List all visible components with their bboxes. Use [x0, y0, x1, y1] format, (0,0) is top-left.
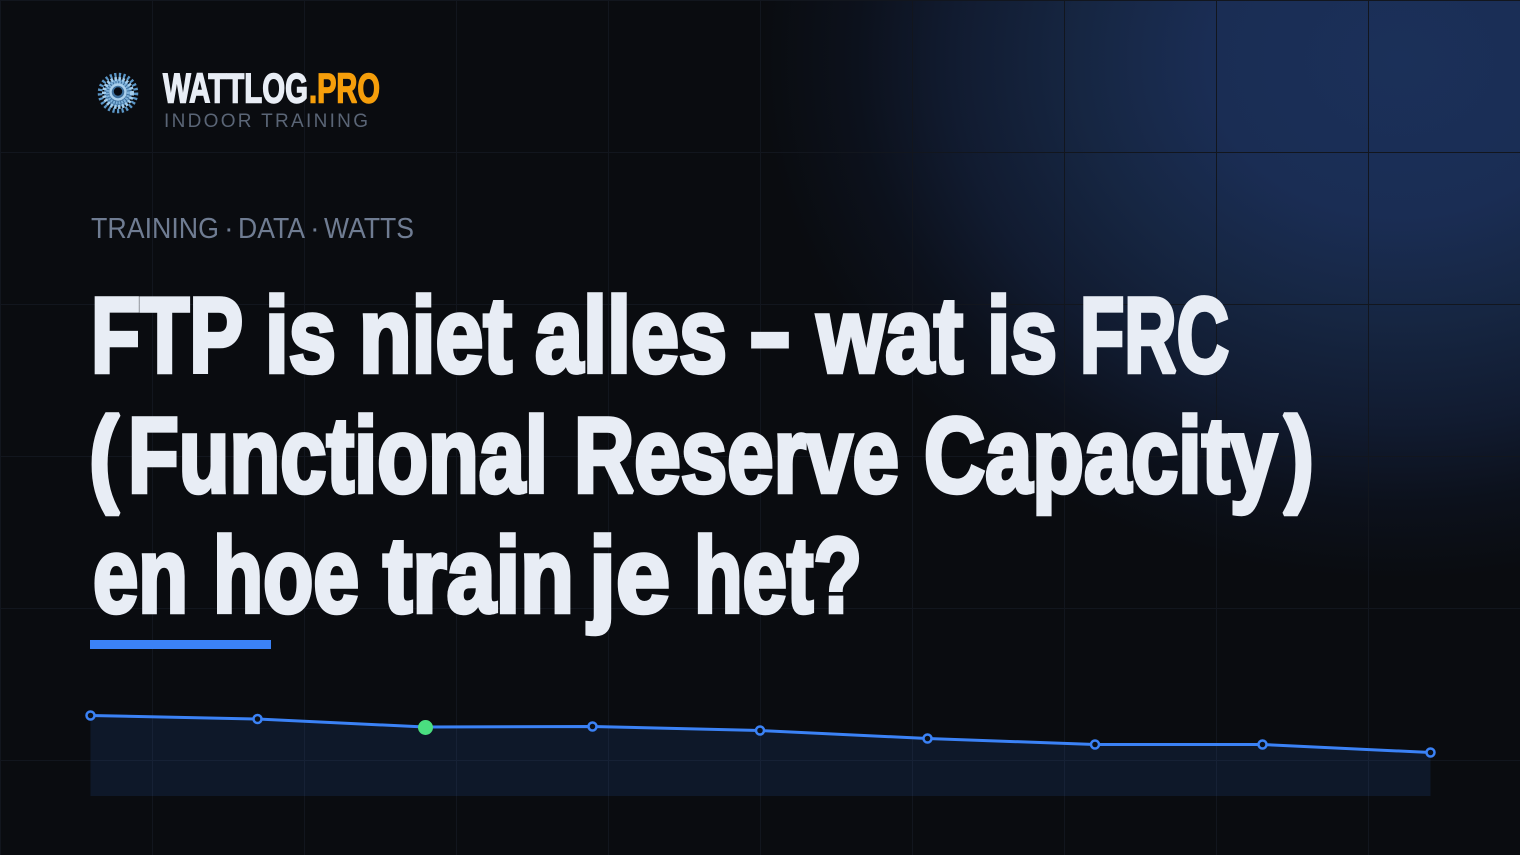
tagline: · — [310, 213, 320, 245]
tagline: DATA — [238, 213, 306, 245]
title: het? — [694, 515, 862, 635]
title: – — [751, 272, 789, 392]
wordmark: WATTLOG — [163, 64, 308, 112]
title: FRC — [1080, 275, 1229, 395]
wordmark: .PRO — [309, 64, 380, 112]
title: en — [93, 515, 188, 635]
title: wat — [816, 275, 963, 395]
title: Reserve — [574, 395, 899, 515]
tagline: TRAINING — [91, 213, 219, 245]
line chart — [86, 712, 1434, 796]
title: Functional — [128, 395, 548, 515]
tagline — [91, 213, 414, 245]
title accent underline — [90, 640, 271, 649]
title: ( — [89, 395, 119, 515]
chart markers — [86, 712, 1434, 756]
title: is — [265, 275, 336, 395]
icon: cassette gear — [100, 75, 136, 111]
title: niet — [359, 275, 512, 395]
tagline: · — [224, 213, 234, 245]
title: FTP — [91, 275, 243, 395]
title: train — [383, 515, 574, 635]
chart area fill — [90, 716, 1430, 796]
title: Capacity — [924, 395, 1277, 515]
highlighted green marker — [418, 720, 433, 735]
logo — [100, 64, 380, 132]
title: alles — [535, 275, 727, 395]
title — [89, 272, 1314, 635]
chart line — [90, 716, 1430, 752]
title: hoe — [213, 515, 359, 635]
title: ) — [1284, 395, 1314, 515]
tagline: WATTS — [324, 213, 414, 245]
title: is — [987, 275, 1057, 395]
logo subtitle: INDOOR TRAINING — [164, 111, 368, 132]
title: je — [587, 515, 670, 635]
